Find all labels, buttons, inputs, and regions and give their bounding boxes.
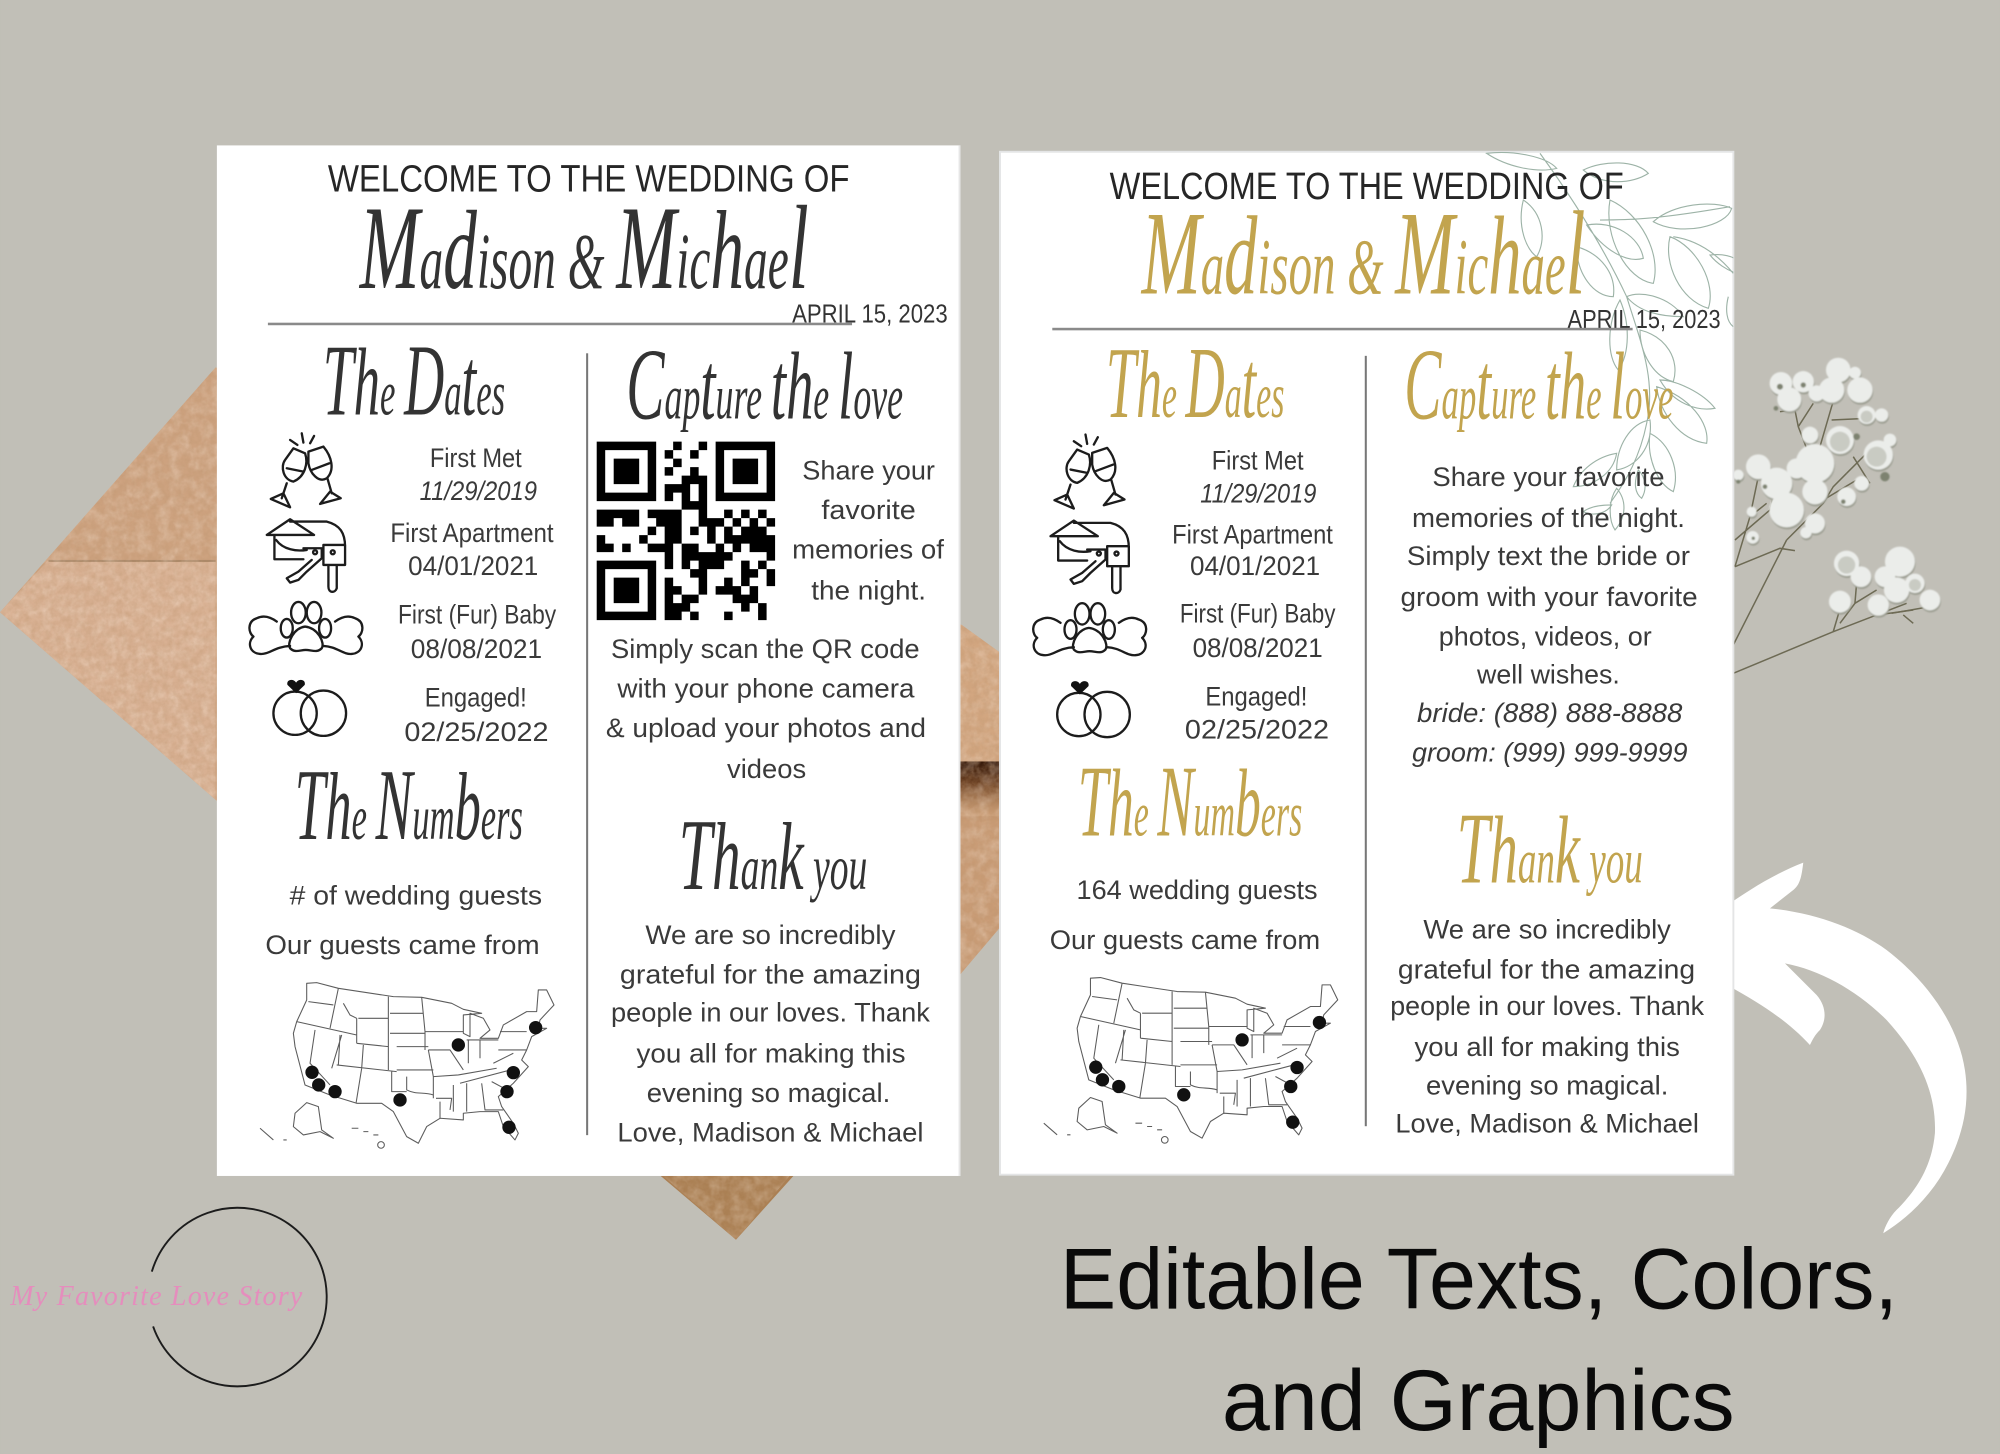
text: thank you message: [611, 920, 930, 1148]
heading: thank you: Thank you: [1457, 793, 1643, 906]
text: share by text message: Simply text the bride or: [1407, 541, 1690, 571]
panel: black wedding program: [217, 145, 960, 1176]
text: thank you message: you all for making this: [1415, 1032, 1680, 1062]
dates list: 08/08/2021: [1193, 633, 1323, 663]
date: APRIL 15, 2023: [792, 301, 948, 329]
dates list: 02/25/2022: [404, 717, 548, 747]
greenery leaves: [1487, 153, 1737, 530]
heading: thank you: Thank you: [679, 799, 867, 912]
text: share by text message: groom with your favorite: [1400, 582, 1698, 612]
text: thank you message: Love, Madison & Michael: [617, 1118, 923, 1148]
text: share by text message: well wishes.: [1476, 660, 1620, 690]
text: scan instructions: [606, 634, 926, 784]
heading: capture the love: Capture the love: [1404, 328, 1673, 441]
text: guest numbers: [265, 880, 542, 960]
heading: the dates: The Dates: [1106, 327, 1284, 440]
date: APRIL 15, 2023: [1568, 306, 1721, 334]
couple names in gold: Madison & Michael: [1140, 186, 1585, 319]
text: thank you message: people in our loves. Thank: [1390, 991, 1705, 1021]
icons: milestones: [1033, 435, 1146, 737]
dates list: [1172, 445, 1336, 744]
text: share memories: favorite: [821, 495, 916, 525]
heading: capture the love: Capture the love: [626, 328, 903, 441]
dates list: 08/08/2021: [411, 634, 542, 664]
text: share memories: [792, 456, 944, 605]
text: scan instructions: Simply scan the QR code: [611, 634, 920, 664]
couple names: Madison & Michael: [359, 181, 809, 314]
text: share by text message: Share your favorite: [1432, 462, 1665, 492]
text: scan instructions: & upload your photos and: [606, 713, 926, 743]
US map with guest locations: [260, 983, 554, 1148]
text: thank you message: grateful for the amazing: [1398, 954, 1695, 984]
text: share by text message: groom: (999) 999-9999: [1412, 737, 1688, 767]
logo: My Favorite Love Story: My Favorite Love Story: [9, 1281, 303, 1312]
text: share by text message: bride: (888) 888-8888: [1417, 698, 1682, 728]
US map with guest locations: [1044, 978, 1338, 1143]
dates list: First Met: [430, 443, 522, 473]
dates list: 11/29/2019: [1200, 479, 1316, 509]
text: thank you message: you all for making this: [636, 1038, 906, 1068]
dates list: First (Fur) Baby: [398, 600, 557, 630]
caption: [1060, 1231, 1898, 1449]
dates list: 11/29/2019: [420, 476, 537, 506]
dates list: [390, 443, 557, 747]
text: thank you message: [1390, 915, 1705, 1139]
logo: My Favorite Love Story: [9, 1208, 327, 1386]
text: share memories: memories of: [792, 535, 944, 565]
text: thank you message: grateful for the amazing: [620, 959, 921, 989]
dates list: 04/01/2021: [1190, 551, 1320, 581]
QR code: [597, 446, 775, 616]
text: thank you message: We are so incredibly: [645, 920, 896, 950]
text: share by text message: photos, videos, or: [1439, 621, 1652, 651]
dates list: 02/25/2022: [1185, 714, 1329, 744]
dates list: First Apartment: [1172, 519, 1333, 549]
text: thank you message: people in our loves. Thank: [611, 998, 930, 1028]
icons: milestones: [249, 433, 362, 736]
curved white arrow: [1730, 863, 1967, 1233]
heading: the numbers: The Numbers: [295, 749, 523, 862]
text: thank you message: Love, Madison & Michael: [1395, 1109, 1699, 1139]
text: thank you message: We are so incredibly: [1423, 915, 1671, 945]
dates list: First (Fur) Baby: [1180, 598, 1336, 628]
text: guest numbers: 164 wedding guests: [1077, 875, 1318, 905]
heading: the dates: The Dates: [323, 325, 505, 438]
heading: welcome: WELCOME TO THE WEDDING OF: [328, 157, 849, 200]
caption: and Graphics: [1222, 1352, 1735, 1449]
dates list: 04/01/2021: [408, 551, 538, 581]
dates list: First Apartment: [390, 518, 554, 548]
heading: welcome: WELCOME TO THE WEDDING OF: [1110, 165, 1624, 208]
text: guest numbers: [1050, 875, 1320, 955]
text: thank you message: evening so magical.: [647, 1078, 890, 1108]
text: share by text message: [1400, 462, 1698, 767]
dates list: Engaged!: [1205, 681, 1307, 711]
text: thank you message: evening so magical.: [1426, 1070, 1668, 1100]
text: share by text message: memories of the night.: [1412, 503, 1685, 533]
dates list: First Met: [1212, 445, 1304, 475]
heading: the numbers: The Numbers: [1078, 745, 1302, 858]
text: share memories: the night.: [811, 575, 926, 605]
text: guest numbers: Our guests came from: [1050, 925, 1320, 955]
text: scan instructions: videos: [727, 754, 806, 784]
panel: gold wedding program with greenery: [1000, 152, 1737, 1175]
text: guest numbers: # of wedding guests: [290, 880, 542, 910]
text: share memories: Share your: [802, 456, 935, 486]
dates list: Engaged!: [425, 683, 527, 713]
caption: Editable Texts, Colors,: [1060, 1231, 1898, 1328]
text: guest numbers: Our guests came from: [265, 930, 540, 960]
baby's breath flowers: [1733, 358, 1941, 673]
kraft paper envelope: [0, 357, 1020, 1250]
text: scan instructions: with your phone camera: [616, 674, 915, 704]
